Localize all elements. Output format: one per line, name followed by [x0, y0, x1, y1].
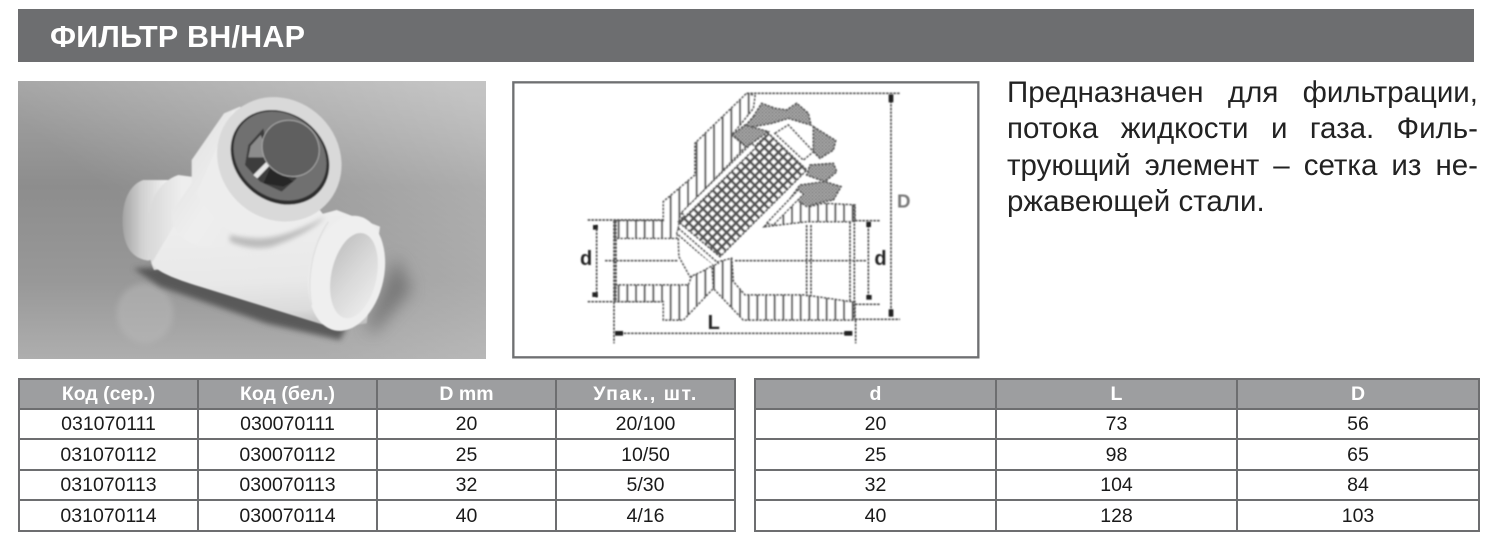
- table: codes and packaging: 030070111: [240, 413, 335, 435]
- drawing: [588, 93, 900, 343]
- table: codes and packaging: 20/100: [616, 413, 675, 435]
- table: codes and packaging: 40: [456, 504, 477, 526]
- table: codes and packaging: 031070113: [60, 474, 157, 496]
- backdrop: [18, 81, 486, 359]
- table: codes and packaging: 030070113: [239, 474, 336, 496]
- table: dimensions: 32: [865, 474, 886, 496]
- table: codes and packaging: Код (бел.): [240, 382, 335, 404]
- table: dimensions: 25: [865, 444, 886, 466]
- table: codes and packaging: 25: [456, 444, 477, 466]
- table: dimensions: 103: [1342, 504, 1374, 526]
- table: codes and packaging: Код (сер.): [62, 382, 155, 404]
- table: codes and packaging: D mm: [439, 382, 494, 404]
- lower right wall: [712, 258, 855, 320]
- cap rim: [191, 71, 367, 247]
- table: codes and packaging: 030070114: [239, 504, 336, 526]
- photo: filter fitting: [18, 81, 486, 359]
- fitting body: [123, 71, 395, 338]
- plug top face: [251, 109, 331, 188]
- cap lobes: [732, 103, 841, 207]
- plug slot: [775, 125, 813, 160]
- table: codes and packaging: 4/16: [627, 504, 664, 526]
- cast shadow and reflection: [117, 257, 412, 343]
- table: dimensions: 65: [1347, 444, 1369, 466]
- dimension labels: L: [708, 312, 720, 334]
- table: dimensions: 56: [1347, 413, 1369, 435]
- table: dimensions: d: [870, 382, 881, 404]
- seat: [678, 238, 713, 277]
- description text: [1007, 76, 1478, 218]
- table: dimensions: L: [1111, 382, 1122, 404]
- description text: ржавеющей стали.: [1007, 185, 1265, 218]
- lower left wall: [615, 263, 713, 320]
- table: codes and packaging: 030070112: [239, 444, 336, 466]
- main tube: [152, 210, 380, 328]
- dimension labels: D: [897, 191, 910, 212]
- right bore: [807, 205, 854, 318]
- branch: [172, 107, 325, 247]
- table: codes and packaging: 031070114: [60, 504, 157, 526]
- plug hex side: [245, 128, 297, 192]
- title bar: [18, 9, 1474, 62]
- dimension arrows: [592, 94, 893, 336]
- upper housing hatch: [615, 93, 755, 238]
- table: dimensions: 98: [1106, 444, 1127, 466]
- table: codes and packaging: 20: [456, 413, 477, 435]
- description text: трующий элемент – сетка из не-: [1007, 149, 1478, 182]
- collar: [148, 175, 233, 270]
- upper right wall: [764, 195, 855, 227]
- dimension lines: [588, 93, 900, 343]
- table: codes and packaging: 5/30: [627, 474, 664, 496]
- description text: потока жидкости и газа. Филь-: [1007, 112, 1478, 145]
- table: codes and packaging: 031070112: [60, 444, 157, 466]
- dimension labels: d: [580, 248, 592, 270]
- title: ФИЛЬТР ВН/НАР: [50, 20, 305, 54]
- mesh screen: [678, 133, 807, 257]
- table: codes and packaging: 32: [456, 474, 477, 496]
- table: codes and packaging: 10/50: [621, 444, 670, 466]
- chrome disc: [212, 90, 348, 224]
- table: dimensions: 84: [1347, 474, 1369, 496]
- table: codes and packaging: [18, 378, 736, 532]
- description text: Предназначен для фильтрации,: [1007, 76, 1478, 109]
- dimension labels: [580, 191, 910, 334]
- dimension labels: d: [874, 248, 887, 270]
- sleeve slots: [682, 143, 756, 217]
- table: codes and packaging: Упак., шт.: [593, 382, 698, 404]
- left stub: [123, 180, 177, 261]
- table: dimensions: [754, 378, 1480, 532]
- table: dimensions: 40: [865, 504, 886, 526]
- table: dimensions: 128: [1100, 504, 1133, 526]
- open tube end: [298, 209, 395, 338]
- table: dimensions: 73: [1106, 413, 1127, 435]
- table: dimensions: D: [1351, 382, 1365, 404]
- table: codes and packaging: 031070111: [61, 413, 156, 435]
- table: dimensions: 20: [865, 413, 886, 435]
- technical drawing panel: [512, 81, 980, 358]
- branch underside shade: [230, 217, 325, 248]
- table: dimensions: 104: [1100, 474, 1133, 496]
- panel frame: [513, 82, 978, 357]
